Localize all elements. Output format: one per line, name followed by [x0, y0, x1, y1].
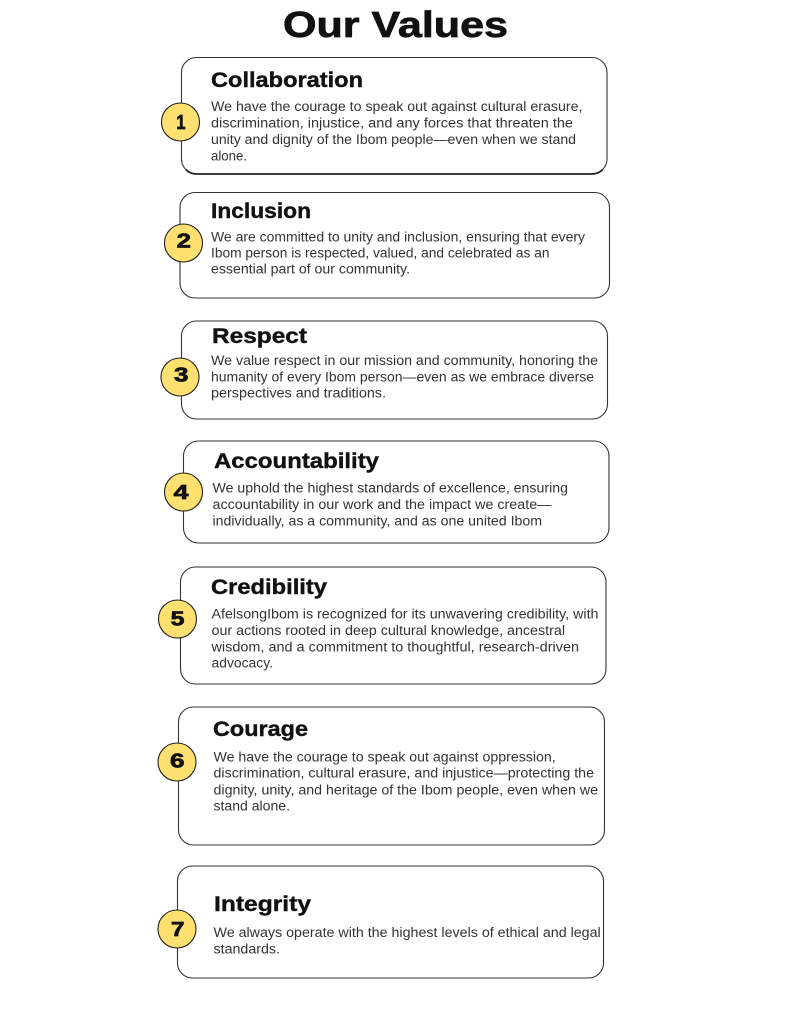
- number badge 7: [158, 910, 196, 948]
- text: credibility description: advocacy.: [212, 656, 273, 671]
- number badge 3: 3: [174, 365, 188, 387]
- number badge 2: 2: [177, 231, 191, 253]
- panel: collaboration: [162, 58, 607, 174]
- text: respect description: [211, 353, 598, 401]
- number badge 5: 5: [171, 609, 184, 631]
- number badge 2: [164, 224, 202, 262]
- number badge 1: 1: [176, 112, 186, 134]
- text: respect description: We value respect in our mission and community, honoring the: [211, 353, 598, 368]
- text: collaboration description: alone.: [211, 148, 247, 163]
- number badge 4: [164, 473, 202, 511]
- text: accountability description: individually, as a community, and as one united Ibom: [212, 513, 542, 528]
- text: courage description: We have the courage to speak out against oppression,: [214, 750, 556, 765]
- text: credibility description: AfelsongIbom is recognized for its unwavering credibility, with: [212, 606, 598, 621]
- panel: accountability: [164, 441, 609, 543]
- text: credibility description: [210, 606, 599, 671]
- heading: respect: Respect: [212, 325, 307, 348]
- text: inclusion description: essential part of our community.: [211, 261, 410, 276]
- panel: respect: [161, 321, 608, 419]
- text: inclusion description: Ibom person is respected, valued, and celebrated as an: [211, 246, 550, 261]
- number badge 5: [158, 600, 196, 638]
- heading: accountability: Accountability: [214, 450, 379, 473]
- heading: credibility: Credibility: [211, 576, 327, 599]
- text: collaboration description: unity and dignity of the Ibom people—even when we stand: [211, 132, 576, 147]
- panel: inclusion: [164, 192, 610, 298]
- title: Our Values: [283, 4, 508, 45]
- panel: courage: [158, 707, 604, 845]
- text: courage description: dignity, unity, and heritage of the Ibom people, even when we: [214, 782, 598, 797]
- text: courage description: discrimination, cultural erasure, and injustice—protecting the: [214, 766, 594, 781]
- number badge 7: 7: [171, 919, 184, 941]
- text: integrity description: We always operate with the highest levels of ethical and legal: [214, 925, 601, 940]
- number badge 6: 6: [170, 751, 184, 773]
- text: collaboration description: discrimination, injustice, and any forces that threaten the: [211, 116, 573, 131]
- text: accountability description: accountability in our work and the impact we create—: [212, 497, 552, 512]
- text: respect description: humanity of every Ibom person—even as we embrace diverse: [211, 370, 594, 385]
- text: courage description: [214, 750, 598, 814]
- heading: inclusion: Inclusion: [211, 200, 311, 223]
- text: inclusion description: [211, 230, 585, 276]
- text: collaboration description: [211, 99, 582, 163]
- text: collaboration description: We have the courage to speak out against cultural erasure,: [211, 99, 582, 114]
- number badge 3: [161, 358, 199, 396]
- text: courage description: stand alone.: [214, 799, 290, 814]
- heading: integrity: Integrity: [214, 893, 311, 916]
- panel: integrity: [158, 866, 604, 978]
- text: inclusion description: We are committed to unity and inclusion, ensuring that every: [211, 230, 585, 245]
- text: respect description: perspectives and traditions.: [211, 386, 386, 401]
- text: credibility description: wisdom, and a commitment to thoughtful, research-driven: [210, 639, 579, 654]
- text: integrity description: standards.: [214, 941, 280, 956]
- text: accountability description: [212, 481, 568, 528]
- number badge 6: [158, 743, 196, 781]
- text: accountability description: We uphold the highest standards of excellence, ensuring: [212, 481, 568, 496]
- number badge 4: 4: [174, 482, 190, 504]
- panel: credibility: [158, 567, 606, 684]
- text: credibility description: our actions rooted in deep cultural knowledge, ancestral: [212, 623, 565, 638]
- text: integrity description: [214, 925, 601, 956]
- heading: collaboration: Collaboration: [211, 69, 363, 92]
- heading: courage: Courage: [213, 718, 308, 741]
- number badge 1: [162, 103, 200, 141]
